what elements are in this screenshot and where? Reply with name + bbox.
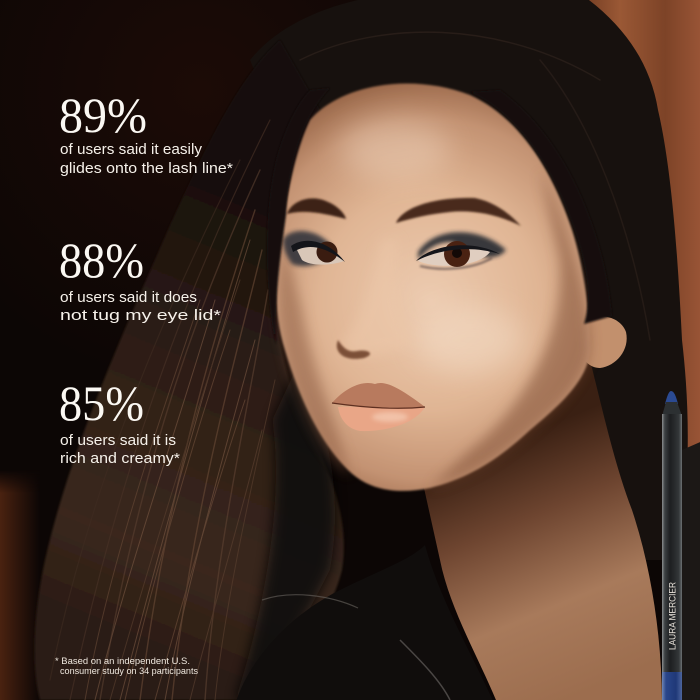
hair: crown and right side [250,0,688,560]
pencil sharpened cone [662,402,682,416]
stat number: 85% [59,375,144,431]
stat description: of users said it easily [60,142,203,158]
left eyebrow [287,198,346,219]
ear [580,317,627,368]
stat description: of users said it is [60,433,176,449]
stat: 89% [59,87,233,177]
pencil blue end cap [662,672,682,700]
footnote: * Based on an independent U.S. [55,656,190,666]
pencil brand name: LAURA MERCIER [668,582,678,650]
hair strands framing the face [267,88,330,345]
stat number: 88% [59,232,144,288]
right eyebrow [396,198,521,226]
footnote: consumer study on 34 participants [60,666,198,676]
hair fringe on right of forehead [470,90,612,324]
left cheek shadow [278,240,350,475]
face edge shadow [430,170,590,488]
pencil body [662,414,682,672]
forehead highlight [340,120,450,180]
nose shadow [337,340,370,359]
eye pencil product [662,391,682,700]
stat: 88% [59,232,221,324]
shadowed hair beside the jaw [235,360,335,700]
right eye [416,232,506,269]
stat description: rich and creamy* [60,451,180,467]
nose [342,240,412,356]
lips [332,383,425,431]
stat number: 89% [59,87,147,143]
stat: 85% [59,375,180,467]
left eye [283,231,345,266]
stat description: of users said it does [60,290,197,306]
leather jacket [235,440,700,700]
stat description: not tug my eye lid* [60,308,221,324]
face [276,83,590,491]
neck [420,360,662,700]
pencil tip [665,391,678,404]
cheek highlight [415,306,525,374]
stat description: glides onto the lash line* [60,161,233,177]
